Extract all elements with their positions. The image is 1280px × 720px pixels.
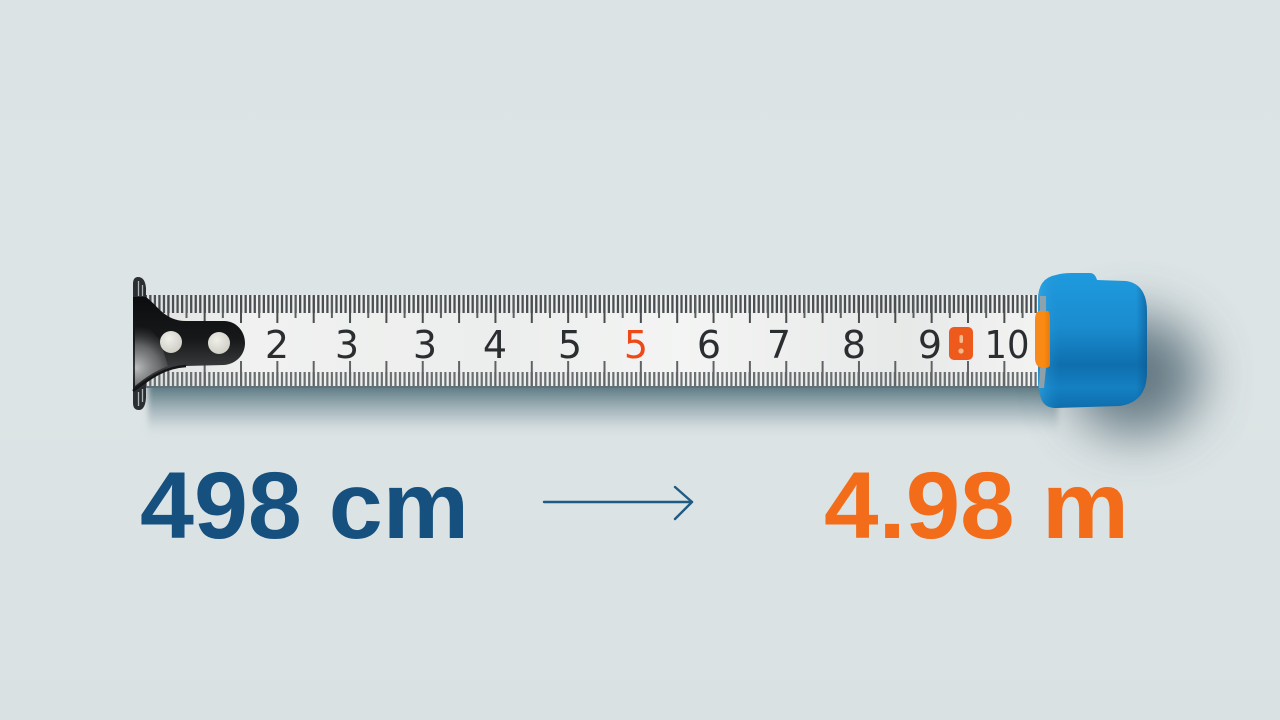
tape numbers: 5 [558, 323, 582, 367]
tape numbers: 2 [265, 323, 289, 367]
icon: end hook [133, 277, 245, 410]
tape numbers: 9 [918, 323, 942, 367]
orange marker [949, 327, 973, 360]
tape numbers: 4 [483, 323, 507, 367]
tape numbers: 3 [413, 323, 437, 367]
tape numbers: 8 [842, 323, 866, 367]
tape numbers: 10 [984, 323, 1030, 367]
icon: rivet [208, 332, 230, 354]
tape numbers: 5 [624, 323, 648, 367]
icon: rivet [160, 331, 182, 353]
arrow [544, 487, 692, 519]
tape shadow [148, 315, 1201, 438]
icon: blue tape housing [1038, 273, 1147, 408]
icon: orange tab [1035, 311, 1050, 368]
tape measure [133, 273, 1147, 410]
tape numbers: 6 [697, 323, 721, 367]
tape numbers: 3 [335, 323, 359, 367]
tape numbers [265, 323, 1030, 367]
tape numbers: 7 [767, 323, 791, 367]
value: metres: 4.98 m [824, 453, 1129, 559]
value: centimetres: 498 cm [140, 453, 469, 559]
tape blade [145, 295, 1042, 388]
